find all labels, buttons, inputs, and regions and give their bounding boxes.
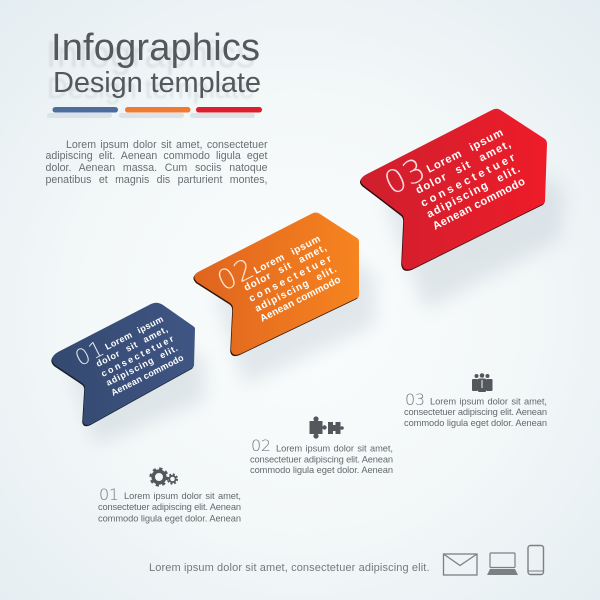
- item 03 text: [404, 396, 547, 428]
- icon: people: [472, 373, 492, 392]
- item 02 number: 02: [251, 436, 271, 455]
- icon: gears: [151, 469, 177, 485]
- title shadow: [46, 34, 255, 105]
- intro paragraph: penatibus et magnis dis parturient montes,: [46, 174, 268, 186]
- footer text: Lorem ipsum dolor sit amet, consectetuer adipiscing elit.: [149, 562, 430, 574]
- card 03 text: Lorem ipsum: [425, 127, 505, 176]
- item 03 text: Lorem ipsum dolor sit amet,: [430, 396, 547, 406]
- icon: puzzle pieces: [310, 416, 344, 439]
- item 03 text: consectetuer adipiscing elit. Aenean: [404, 407, 547, 417]
- item 02 text: [250, 444, 393, 475]
- intro paragraph: [46, 138, 268, 186]
- card 02 number: 02: [212, 252, 259, 298]
- item 03: [404, 390, 547, 428]
- card 03: red arrow: [360, 109, 565, 310]
- card 02 text: adipiscing elit.: [253, 264, 339, 315]
- item 01 text: [98, 491, 241, 524]
- card 02 text: [242, 234, 343, 325]
- card 02 text: dolor sit amet,: [242, 242, 329, 294]
- card 02: orange arrow: [193, 212, 375, 385]
- item 01 text: Lorem ipsum dolor sit amet,: [124, 491, 241, 501]
- item 01 number: 01: [99, 485, 119, 504]
- card 01 text: Aenean commodo: [109, 352, 186, 398]
- card 02 text: Lorem ipsum: [252, 234, 322, 277]
- icon: phone: [528, 546, 544, 574]
- item 01: [98, 485, 241, 524]
- icon: laptop: [487, 553, 518, 575]
- item 03 text: commodo ligula eget dolor. Aenean: [404, 418, 547, 428]
- intro paragraph: Lorem ipsum dolor sit amet, consectetuer: [66, 138, 268, 150]
- title: Design template: [53, 67, 261, 99]
- card 02 text: consectetuer: [247, 254, 334, 305]
- title shadow: Design template: [47, 73, 255, 105]
- item 02 text: commodo ligula eget dolor. Aenean: [250, 465, 393, 475]
- card 01 text: consectetuer: [99, 333, 176, 379]
- item 01 text: consectetuer adipiscing elit. Aenean: [98, 502, 241, 512]
- card 01 text: Lorem ipsum: [103, 314, 165, 352]
- intro paragraph: dolor. Aenean massa. Cum sociis natoque: [46, 162, 268, 174]
- icon: envelope: [444, 554, 477, 575]
- card 03 text: [414, 127, 527, 233]
- card 01 text: adipiscing elit.: [104, 343, 179, 388]
- card 03 text: consectetuer: [419, 151, 518, 210]
- card 03 text: dolor sit amet,: [414, 138, 513, 197]
- card 03 text: adipiscing elit.: [425, 163, 522, 221]
- title: Infographics: [51, 27, 260, 69]
- accent bars: [47, 107, 262, 118]
- card 01 text: dolor sit amet,: [94, 324, 169, 369]
- item 01 text: commodo ligula eget dolor. Aenean: [98, 514, 241, 524]
- item 03 number: 03: [405, 390, 425, 409]
- card 01 text: [94, 314, 186, 398]
- title: [51, 27, 261, 99]
- item 02: [250, 436, 393, 475]
- card 02 text: Aenean commodo: [258, 274, 343, 325]
- item 02 text: consectetuer adipiscing elit. Aenean: [250, 454, 393, 464]
- card 01 number: 01: [71, 336, 109, 372]
- card 03 text: Aenean commodo: [431, 176, 527, 233]
- card 03 number: 03: [378, 150, 432, 203]
- intro paragraph: adipiscing elit. Aenean commodo ligula eget: [46, 150, 268, 162]
- item 02 text: Lorem ipsum dolor sit amet,: [276, 444, 393, 454]
- card 01: blue arrow: [51, 303, 205, 445]
- title shadow: Infographics: [46, 34, 255, 76]
